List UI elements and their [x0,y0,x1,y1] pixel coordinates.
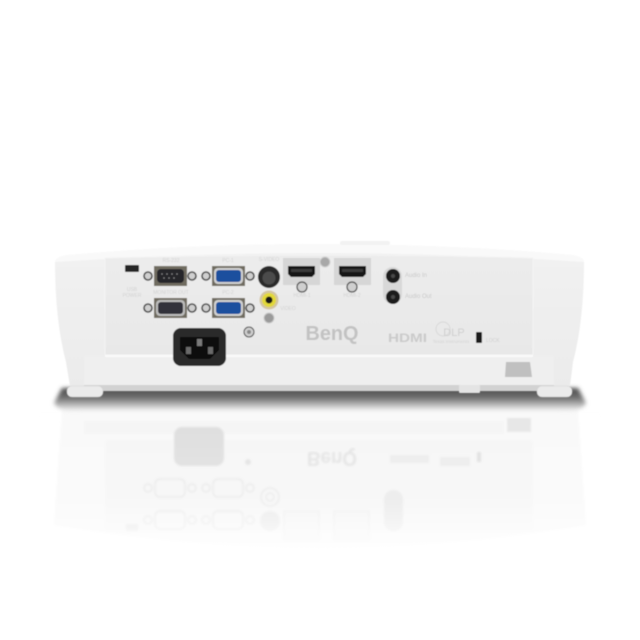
BenQ logo: BenQ [306,323,358,345]
screws [244,257,330,337]
DLP logo [433,322,470,344]
labels above connectors: S-VIDEO [259,257,279,263]
grey vent tab [505,362,532,377]
reflected power socket [174,427,224,466]
HDMI 2 port [334,258,371,299]
labels above connectors: RS-232 [163,258,180,264]
HDMI 2 port: HDMI-2 [343,293,361,299]
foot: left [67,386,103,397]
labels above connectors [153,257,296,312]
reflected grey tab [507,418,531,432]
projector assembly [55,241,584,397]
port: composite video RCA [260,290,278,310]
HDMI 1 port [283,258,320,299]
labels above connectors: MONITOR OUT [153,290,189,296]
power socket [173,328,226,366]
reflected audio jacks [384,490,403,531]
lower strip [84,356,554,386]
DLP logo: DLP [443,327,465,339]
labels above connectors: PC-2 [222,290,234,296]
reflected HDMI and DLP logos [390,455,470,466]
port: S-Video [258,266,280,288]
label: USB port: POWER [123,293,142,299]
bottom edge [84,385,554,391]
label: USB port: USB [127,287,137,293]
reflected lock [477,452,481,462]
projector body [55,241,584,391]
outer shell [55,244,584,386]
audio labels: Audio In [405,273,427,279]
floor shadow [54,388,586,412]
audio labels [405,273,432,300]
HDMI logo: HDMI [388,331,427,345]
reflected BenQ logo: BenQ [307,447,357,469]
top rim [55,244,584,262]
strip highlight [105,355,533,357]
USB mini port [125,265,139,272]
reflected s-video port [260,511,280,531]
reflected upper ports [144,479,279,529]
reflected lower strip [84,421,504,434]
connector: monitor out DB15 [144,298,196,318]
rear panel [105,255,533,355]
reflected USB port [126,524,138,531]
DLP logo: Texas Instruments [433,339,470,344]
reflected HDMI boxes [284,511,369,540]
connector: VGA in top [202,266,254,286]
reflected body [54,410,586,548]
audio jacks [383,267,402,304]
connector: serial DB9 top [144,266,196,286]
top buttons bump [340,241,390,245]
reflection fade [40,410,600,560]
connector: VGA in bottom [202,298,254,318]
lock label: LOCK [486,338,500,344]
foot: centre [459,385,480,393]
labels above connectors: VIDEO [280,306,296,312]
reflection of projector [40,410,600,560]
labels above connectors: PC-1 [222,258,234,264]
audio labels: Audio Out [405,294,432,300]
HDMI 1 port: HDMI-1 [293,293,311,299]
reflected panel [105,440,533,530]
foot: right [537,386,572,397]
reflected screw [245,459,251,465]
security lock slot [476,332,482,343]
